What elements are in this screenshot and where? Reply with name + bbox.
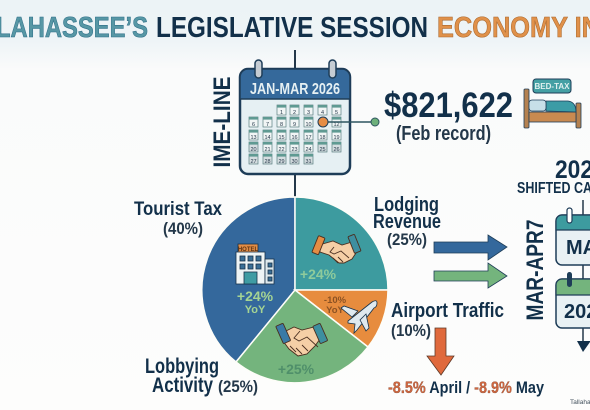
calendar date cells: 17	[305, 135, 312, 141]
calendar: Jan-Mar 2026: JAN-MAR 2026	[250, 81, 340, 98]
calendar date cells: 14	[264, 135, 271, 141]
record amount: $821,622	[384, 86, 513, 125]
label: lobbying activity	[145, 355, 258, 397]
record label: (Feb record)	[396, 123, 491, 145]
airport change: YoY	[326, 305, 345, 316]
hotel sign text: HOTEL	[238, 247, 258, 253]
calendar date cells: 6	[252, 122, 255, 128]
calendar date cells: 16	[291, 135, 298, 141]
calendar date cells: 30	[291, 159, 298, 165]
calendar date cells: 2	[293, 110, 296, 116]
calendar date cells: 18	[319, 135, 326, 141]
calendar date cells: 3	[307, 110, 310, 116]
source credit: Tallaha	[570, 399, 590, 406]
lodging change: +24%	[300, 266, 337, 282]
calendar: March	[556, 208, 590, 265]
pie chart	[202, 197, 388, 383]
title: LEGISLATIVE SESSION	[156, 12, 428, 44]
icon: hotel	[236, 244, 274, 284]
calendar date cells: 10	[305, 122, 312, 128]
slice: lobbying activity	[236, 290, 368, 383]
calendar date cells: 13	[250, 135, 257, 141]
callout connector	[318, 117, 379, 127]
calendar date cells: 22	[278, 147, 285, 153]
airport decline figures: -8.5% April / -8.9% May	[388, 378, 544, 397]
calendar date cells: 15	[278, 135, 285, 141]
calendar date cells	[249, 105, 341, 165]
calendar date cells: 21	[264, 147, 271, 153]
slice: airport traffic	[295, 290, 388, 347]
timeline spine	[294, 50, 296, 197]
label: lodging revenue: (25%)	[387, 230, 427, 249]
tourist tax change	[237, 288, 274, 316]
calendar date cells: 27	[250, 159, 257, 165]
icon: airplane	[341, 301, 377, 333]
calendar date cells: 31	[305, 159, 312, 165]
calendar date cells: 8	[280, 122, 283, 128]
label: lobbying activity: Activity	[152, 374, 213, 397]
title	[0, 12, 590, 44]
calendar date cells: 25	[319, 147, 326, 153]
calendar date cells: 24	[305, 147, 312, 153]
label: airport traffic	[391, 300, 504, 340]
calendar date cells: 29	[278, 159, 285, 165]
shifted label rotated: MAR-APR7	[522, 220, 549, 320]
calendar date cells: 26	[333, 147, 340, 153]
icon: bed-tax bed	[524, 79, 581, 128]
label: airport traffic: Airport Traffic	[391, 300, 504, 322]
arrowhead: down	[577, 341, 590, 352]
label: lodging revenue: Lodging	[374, 194, 439, 216]
label: airport traffic: (10%)	[391, 321, 431, 340]
arrow: down	[427, 328, 454, 375]
calendar: Jan-Mar 2026	[240, 60, 350, 174]
label: lodging revenue	[373, 194, 441, 249]
tourist tax change: +24%	[237, 288, 274, 304]
title: LAHASSEE’S	[0, 12, 148, 44]
lobbying change: +25%	[278, 361, 315, 377]
calendar date cells: 5	[335, 110, 338, 116]
slice: tourist tax	[202, 197, 295, 362]
airport change	[324, 295, 347, 316]
label: tourist tax	[134, 199, 222, 238]
arrow: green	[434, 263, 507, 288]
timeline label: IME-LINE	[209, 76, 236, 168]
calendar date cells: 12	[333, 122, 340, 128]
slice: lodging revenue	[295, 197, 388, 290]
calendar date cells: 20	[250, 147, 257, 153]
calendar date cells: 23	[291, 147, 298, 153]
icon: handshake teal	[312, 234, 361, 263]
label: tourist tax: (40%)	[163, 219, 203, 238]
arrow: blue	[434, 235, 507, 260]
calendar date cells: 19	[333, 135, 340, 141]
calendar date cells: 1	[280, 110, 283, 116]
icon: handshake green	[276, 323, 328, 356]
right spine	[582, 200, 584, 342]
tourist tax change: YoY	[245, 304, 266, 316]
label: lobbying activity: Lobbying	[145, 355, 219, 378]
calendar date cells: 28	[264, 159, 271, 165]
label: tourist tax: Tourist Tax	[134, 199, 222, 220]
calendar date cells: 9	[293, 122, 296, 128]
icon: bed-tax bed: BED-TAX	[535, 82, 570, 91]
label: lodging revenue: Revenue	[373, 211, 441, 233]
calendar date cells: 7	[266, 122, 269, 128]
airport change: -10%	[324, 295, 347, 306]
calendar: 2026	[556, 272, 590, 328]
calendar date cells: 4	[321, 110, 324, 116]
label: lobbying activity: (25%)	[218, 377, 258, 396]
